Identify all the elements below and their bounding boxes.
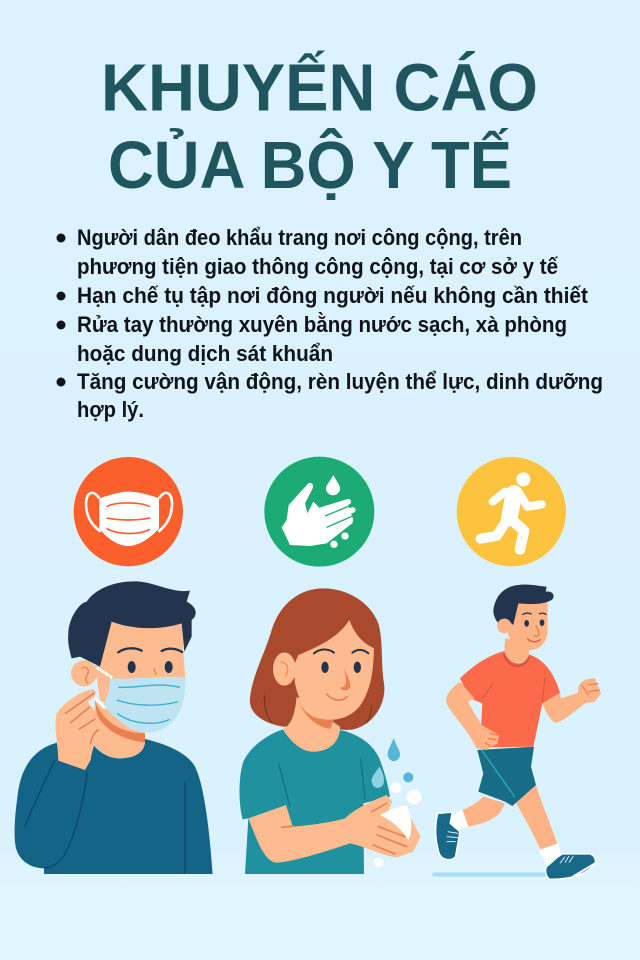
face (293, 620, 374, 720)
title: KHUYẾN CÁO (101, 50, 538, 126)
front leg (514, 785, 558, 851)
hand (56, 689, 100, 770)
hair (250, 588, 384, 730)
right arm (542, 678, 601, 723)
hair (68, 581, 196, 667)
head (95, 622, 185, 707)
icon: washing hands (264, 457, 374, 567)
soap foam (380, 806, 411, 840)
illustration: woman washing hands (239, 588, 421, 874)
shirt (460, 651, 560, 747)
shirt (239, 729, 390, 874)
back shoe (436, 812, 460, 860)
water drops and bubbles (388, 738, 400, 761)
neck (93, 700, 145, 758)
icon: runner (457, 457, 566, 566)
illustration: man jogging (432, 585, 601, 879)
ear (497, 619, 512, 633)
ground shadow (432, 872, 547, 877)
bullet 3: Rửa tay thường xuyên bằng nước sạch, xà phòng (77, 312, 567, 337)
bullet 3: hoặc dung dịch sát khuẩn (77, 341, 333, 366)
bullet 4: hợp lý. (77, 397, 144, 422)
left arm (446, 682, 499, 750)
title (101, 50, 538, 203)
back leg (462, 797, 505, 827)
hair (493, 585, 554, 625)
sweater (15, 739, 213, 874)
mask (103, 677, 185, 733)
shorts (477, 747, 536, 806)
icon: face mask (74, 457, 183, 566)
bullet 4 (56, 369, 603, 422)
bullet 1: Người dân đeo khẩu trang nơi công cộng, trên (77, 225, 522, 250)
bullet 1: phương tiện giao thông công cộng, tại cơ sở y tế (77, 254, 559, 279)
bullet 1 (56, 225, 559, 279)
neck and head (504, 638, 529, 663)
ear (71, 660, 97, 686)
face details (118, 648, 182, 652)
neck (283, 697, 340, 752)
title: CỦA BỘ Y TẾ (108, 128, 512, 203)
illustration: man wearing mask (15, 581, 213, 874)
bullet 4: Tăng cường vận động, rèn luyện thể lực, dinh dưỡng (77, 369, 603, 394)
ear (273, 652, 296, 686)
bullet 3 (56, 312, 567, 366)
arms and hands (248, 795, 421, 863)
face details (524, 620, 529, 627)
front shoe (546, 854, 595, 879)
bullet 2: Hạn chế tụ tập nơi đông người nếu không cần thiết (77, 283, 589, 308)
recommendations list (56, 225, 603, 422)
